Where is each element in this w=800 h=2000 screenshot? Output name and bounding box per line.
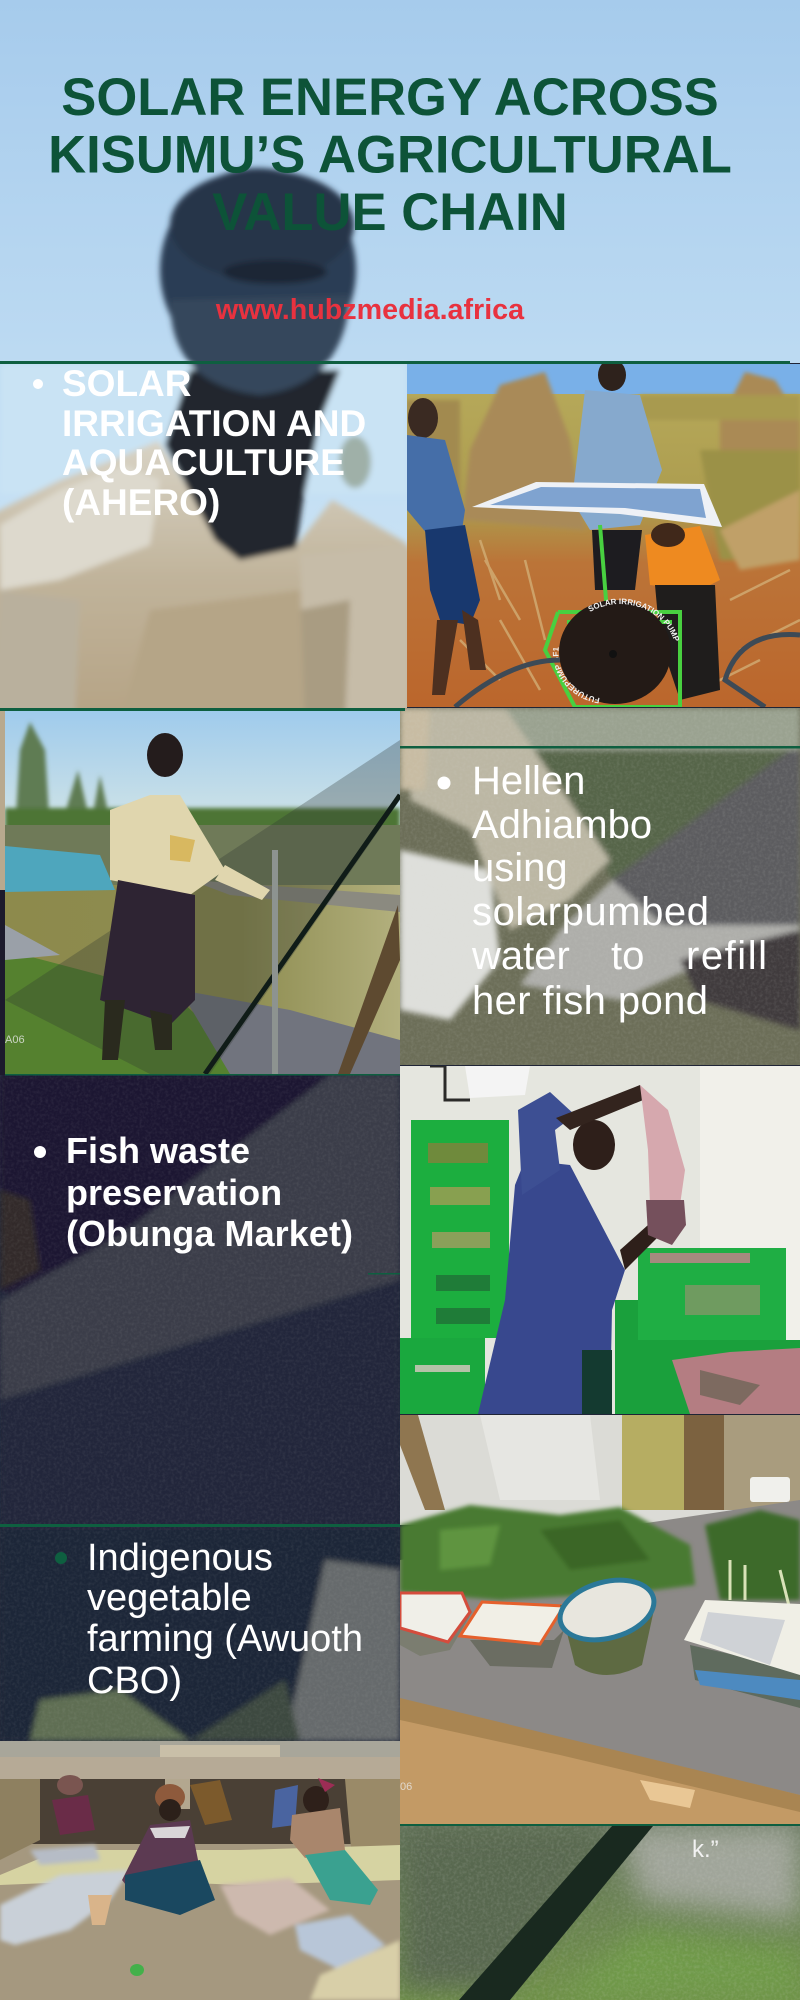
text block: fish waste preservation bbox=[34, 1130, 353, 1254]
website url: www.hubzmedia.africa bbox=[215, 294, 525, 326]
text block: solar irrigation and aquaculture: SOLAR bbox=[62, 363, 192, 404]
panel: hero portrait background bbox=[0, 0, 800, 720]
shade net bbox=[5, 740, 400, 1074]
text block: indigenous vegetable farming: CBO) bbox=[87, 1660, 182, 1702]
lower left crate bbox=[400, 1338, 485, 1414]
hoses bbox=[455, 635, 800, 707]
pond water bbox=[5, 885, 400, 1040]
panel: solar pump photo bbox=[407, 364, 800, 707]
text block: Hellen Adhiambo caption: refill bbox=[686, 934, 767, 978]
text block: indigenous vegetable farming: vegetable bbox=[87, 1577, 252, 1619]
blue round tub bbox=[553, 1571, 661, 1675]
text block: fish waste preservation: preservation bbox=[66, 1172, 282, 1213]
man in blue coat bbox=[478, 1085, 660, 1414]
concrete beam bbox=[0, 1757, 400, 1779]
dark shed underside bbox=[0, 1779, 400, 1844]
background women bbox=[52, 1775, 298, 1835]
text block: Hellen Adhiambo caption: to bbox=[611, 934, 644, 978]
pond netting band bbox=[5, 825, 400, 885]
maize stalk piles bbox=[407, 372, 800, 570]
pond liner bbox=[180, 990, 400, 1074]
air conditioner bbox=[465, 1066, 530, 1098]
panel: dark mesh background bbox=[0, 1075, 400, 1741]
pillars bbox=[0, 1779, 40, 1860]
pump disc with labels bbox=[552, 598, 679, 704]
text block: solar irrigation and aquaculture: (AHERO) bbox=[62, 482, 220, 523]
small dropped item bbox=[130, 1964, 144, 1976]
leafy greens bbox=[400, 1505, 800, 1600]
text block: indigenous vegetable farming: Indigenous bbox=[87, 1537, 273, 1579]
panel: grass and net close-up bbox=[400, 1826, 800, 2000]
panel: Hellen mesh close-up background bbox=[400, 708, 800, 1065]
tree line bbox=[5, 722, 400, 834]
text block: Hellen Adhiambo caption bbox=[438, 759, 767, 1023]
white container bbox=[684, 1600, 800, 1708]
text block: indigenous vegetable farming: farming (Awuoth bbox=[87, 1618, 363, 1660]
grey table bbox=[400, 1500, 800, 1800]
title: VALUE CHAIN bbox=[212, 183, 568, 242]
woman seated, tan shirt bbox=[290, 1778, 378, 1905]
grass bank bbox=[5, 958, 230, 1074]
text block: Hellen Adhiambo caption: Adhiambo bbox=[472, 803, 652, 847]
left edge strip beside pond photo bbox=[0, 711, 5, 1075]
wooden post bbox=[338, 905, 400, 1074]
divider in vegetable panel bbox=[0, 1524, 400, 1527]
fence posts bbox=[400, 1415, 445, 1510]
sky strip bbox=[407, 364, 800, 394]
red lid container bbox=[400, 1592, 472, 1656]
crouching man in orange bbox=[645, 523, 720, 700]
lower crates behind man bbox=[615, 1300, 638, 1414]
text block: Hellen Adhiambo caption: water bbox=[471, 934, 570, 978]
dark net strip bbox=[459, 1826, 653, 2000]
text block: indigenous vegetable farming bbox=[55, 1537, 363, 1702]
wooden edge and ground bbox=[400, 1700, 800, 1824]
green pump frame bbox=[545, 525, 680, 707]
panel: pond photo of woman refilling fish pond bbox=[5, 711, 400, 1075]
orange lid container bbox=[460, 1602, 564, 1668]
text block: Hellen Adhiambo caption: using bbox=[472, 846, 568, 890]
divider above pond photo bbox=[5, 1074, 400, 1076]
cloth layer bbox=[0, 1845, 400, 1885]
text block: fish waste preservation: Fish waste bbox=[66, 1130, 250, 1171]
pump disc with labels: SOLAR IRRIGATION PUMP bbox=[588, 598, 679, 641]
title: SOLAR ENERGY ACROSS bbox=[61, 68, 719, 127]
woman seated, dark skirt bbox=[88, 1784, 215, 1925]
panel: fish cold-room photo bbox=[400, 1066, 800, 1414]
hero heading divider line bbox=[0, 361, 790, 364]
held fish bbox=[640, 1085, 686, 1245]
camera watermark: A06 bbox=[5, 1034, 25, 1046]
text block: fish waste preservation: (Obunga Market) bbox=[66, 1213, 353, 1254]
text block: Hellen Adhiambo caption: solarpumbed bbox=[472, 890, 709, 934]
yard through fence bbox=[622, 1415, 686, 1510]
pump disc with labels: FUTUREPUMP SF1 bbox=[552, 647, 600, 704]
text block: solar irrigation and aquaculture: IRRIGATION AND bbox=[62, 403, 366, 444]
divider in Hellen panel bbox=[400, 746, 800, 748]
solar panel bbox=[472, 482, 722, 527]
white bucket bbox=[750, 1477, 790, 1502]
text block: Hellen Adhiambo caption: Hellen bbox=[472, 759, 585, 803]
divider below vegetable photo bbox=[400, 1824, 800, 1826]
title: KISUMU’S AGRICULTURAL bbox=[48, 126, 732, 184]
dry stalks on ground bbox=[460, 540, 800, 690]
panel: women sorting fish at market bbox=[0, 1741, 400, 2000]
blue tarp bbox=[5, 846, 115, 892]
short marker in dark panel bbox=[368, 1273, 400, 1274]
man in light blue shirt bbox=[572, 359, 662, 590]
text block: solar irrigation and aquaculture bbox=[33, 363, 366, 523]
divider below hero bbox=[0, 708, 405, 711]
boy on left bbox=[407, 398, 486, 695]
water pipe bbox=[272, 850, 278, 1074]
text fragment: k.” bbox=[692, 1836, 719, 1863]
left crate stack bbox=[411, 1120, 509, 1338]
text block: solar irrigation and aquaculture: AQUACULTURE bbox=[62, 442, 345, 483]
woman bbox=[100, 733, 270, 1060]
fish scraps on nets bbox=[0, 1845, 400, 2000]
chard stems bbox=[730, 1560, 790, 1610]
title bbox=[48, 68, 732, 242]
camera watermark: 06 bbox=[400, 1781, 412, 1793]
panel: vegetables and dried produce photo bbox=[400, 1415, 800, 1824]
right upper crate bbox=[638, 1248, 786, 1340]
right lower crate with fish bbox=[638, 1340, 800, 1414]
text block: Hellen Adhiambo caption: her fish pond bbox=[472, 979, 708, 1023]
